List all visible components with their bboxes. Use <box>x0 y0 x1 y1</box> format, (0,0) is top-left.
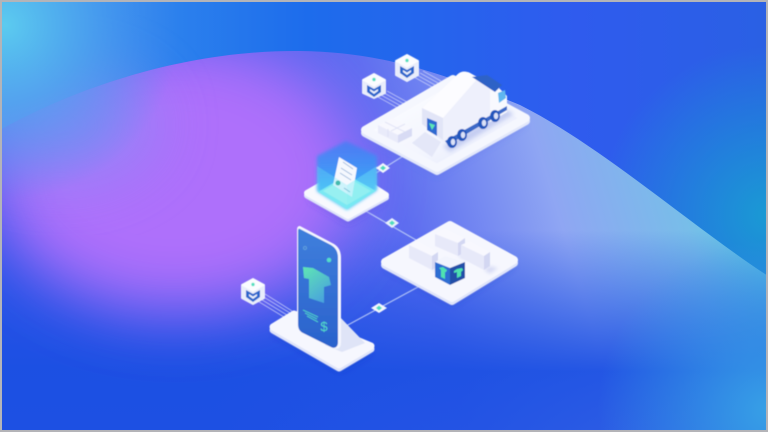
truck shadow <box>443 110 514 152</box>
panel: document platform <box>307 141 386 223</box>
icon: glass cube with document <box>317 141 377 210</box>
truck wheels <box>447 110 500 148</box>
phone dollar sign: $ <box>320 319 328 334</box>
panel: truck platform <box>364 72 526 176</box>
icon: connector node middle <box>385 218 399 228</box>
box shadows <box>432 252 498 274</box>
truck cab <box>490 84 507 122</box>
icon: large white box left <box>409 241 438 270</box>
icon: stacked parcels <box>378 118 412 143</box>
circuit traces: lower cube <box>256 294 292 317</box>
document sheet <box>333 157 357 197</box>
icon: large white box back <box>435 228 465 256</box>
icon: security cube right <box>396 55 418 81</box>
phone price lines <box>303 310 318 322</box>
truck cargo door icon <box>427 118 437 136</box>
panel: phone platform <box>272 226 372 371</box>
icon: loading ramp <box>412 132 441 157</box>
truck body <box>422 72 490 142</box>
icon: large white box right <box>461 241 490 270</box>
icon: delivery truck <box>422 72 514 152</box>
phone shirt graphic <box>303 267 331 303</box>
icon: connector node lower <box>371 303 387 313</box>
circuit traces: upper cubes <box>378 71 441 108</box>
icon: connector node upper <box>376 163 390 173</box>
connector lines between platforms <box>346 153 418 326</box>
icon: blue shirt box <box>435 256 465 285</box>
icon: smartphone <box>297 226 365 352</box>
illustration group <box>242 55 526 371</box>
truck undercarriage <box>445 106 507 145</box>
panel: warehouse platform <box>384 225 515 305</box>
icon: security cube left <box>363 74 385 98</box>
icon: security cube lower <box>242 279 264 304</box>
